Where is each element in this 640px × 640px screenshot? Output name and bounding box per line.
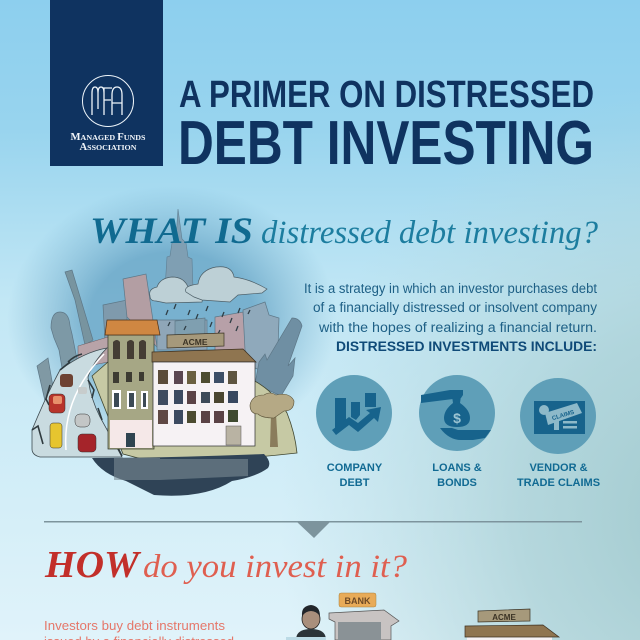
icon labels: COMPANY <box>327 462 383 474</box>
icon labels <box>327 462 600 489</box>
heading: what is: WHAT IS <box>90 211 253 252</box>
logo panel <box>50 0 163 166</box>
how body text: Investors buy debt instruments <box>44 618 226 633</box>
long white building <box>152 349 256 446</box>
underside reflection <box>92 454 269 496</box>
logo name <box>70 132 146 153</box>
icon labels: LOANS & <box>432 462 482 474</box>
illustration: ACME building <box>465 609 559 640</box>
icon labels: DEBT <box>340 477 370 489</box>
heading: how: do you invest in it? <box>143 549 408 585</box>
how body text <box>44 618 234 640</box>
illustration: investor and bank: BANK <box>344 596 371 606</box>
section divider with arrow <box>44 521 582 538</box>
rain <box>166 304 250 334</box>
island ground <box>92 362 297 462</box>
heading: how: HOW <box>44 544 142 586</box>
icon: claims <box>520 378 596 454</box>
pink back building <box>78 337 108 368</box>
heading: what is: distressed debt investing? <box>261 215 598 251</box>
road <box>32 348 122 457</box>
icon labels: VENDOR & <box>529 462 588 474</box>
icon: claims: CLAIMS <box>551 410 575 422</box>
skyline buildings <box>37 270 302 401</box>
intro text: with the hopes of realizing a financial return. <box>318 320 597 335</box>
icon labels: TRADE CLAIMS <box>517 477 600 489</box>
icon: loans and bonds: $ <box>453 410 461 426</box>
illustration: city on island <box>7 185 337 496</box>
subheading: include: DISTRESSED INVESTMENTS INCLUDE: <box>336 339 597 354</box>
title <box>178 74 594 178</box>
bank building <box>329 610 399 640</box>
intro text: It is a strategy in which an investor purchases debt <box>304 281 597 296</box>
intro text <box>304 281 597 354</box>
logo name: MANAGED FUNDS <box>70 132 146 143</box>
investor <box>302 609 320 629</box>
illustration: investor and bank <box>286 593 399 640</box>
illustration: ACME building: ACME <box>492 613 516 622</box>
cars <box>50 423 62 448</box>
tree <box>250 393 294 447</box>
icon labels: BONDS <box>437 477 477 489</box>
ACME sign <box>167 333 224 348</box>
logo emblem <box>82 76 134 126</box>
heading: what is <box>90 211 598 252</box>
icon: loans and bonds <box>419 375 495 451</box>
tower building <box>105 320 160 449</box>
halo behind city <box>7 185 337 455</box>
icon: company debt <box>316 375 392 451</box>
ACME sign: ACME <box>182 337 208 347</box>
clouds <box>150 267 267 303</box>
logo name: ASSOCIATION <box>80 142 137 153</box>
bank sign <box>339 593 376 607</box>
intro text: of a financially distressed or insolvent company <box>313 300 597 315</box>
heading: how <box>44 544 408 586</box>
spire tower <box>165 209 193 289</box>
